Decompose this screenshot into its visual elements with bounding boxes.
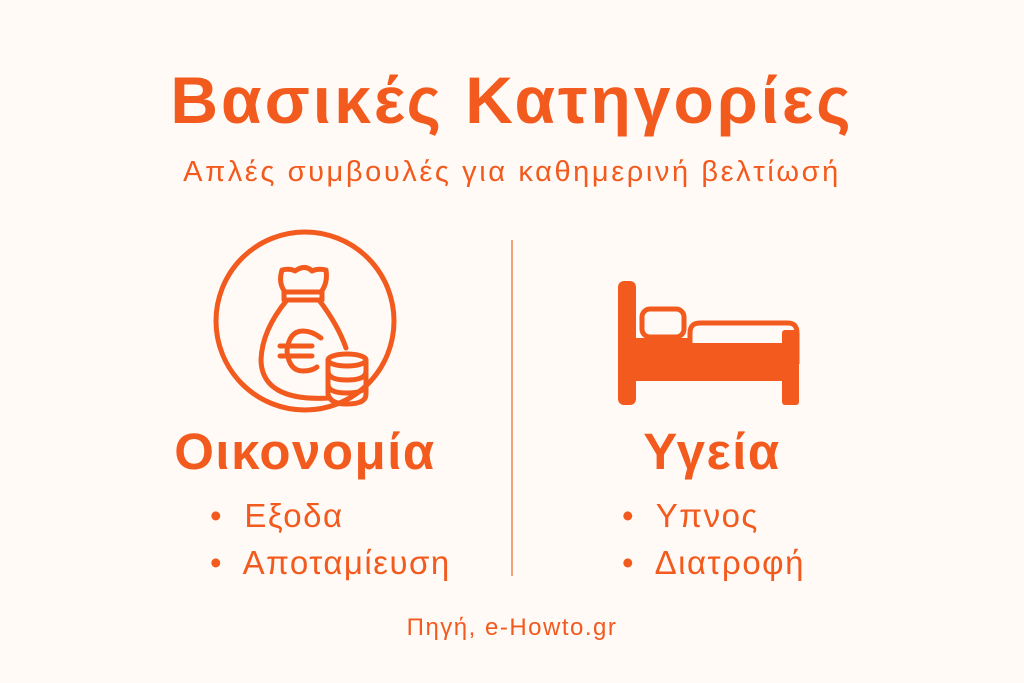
list: health: • Διατροφή <box>622 544 805 581</box>
source: Πηγή, e-Howto.gr <box>407 614 617 641</box>
list: economy: • Αποταμίευση <box>210 544 451 581</box>
divider <box>511 240 513 576</box>
icon: bed <box>618 281 800 405</box>
heading: Οικονομία: Οικονομία <box>174 423 436 480</box>
heading: Υγεία: Υγεία <box>643 423 781 480</box>
list: health: • Υπνος <box>622 497 759 534</box>
title: Βασικές Κατηγορίες <box>170 63 854 137</box>
subtitle: Απλές συμβουλές για καθημερινή βελτίωσή <box>183 156 841 188</box>
list: economy <box>210 497 451 581</box>
list: health <box>622 497 805 581</box>
icon: money bag <box>214 230 396 412</box>
list: economy: • Εξοδα <box>210 497 344 534</box>
